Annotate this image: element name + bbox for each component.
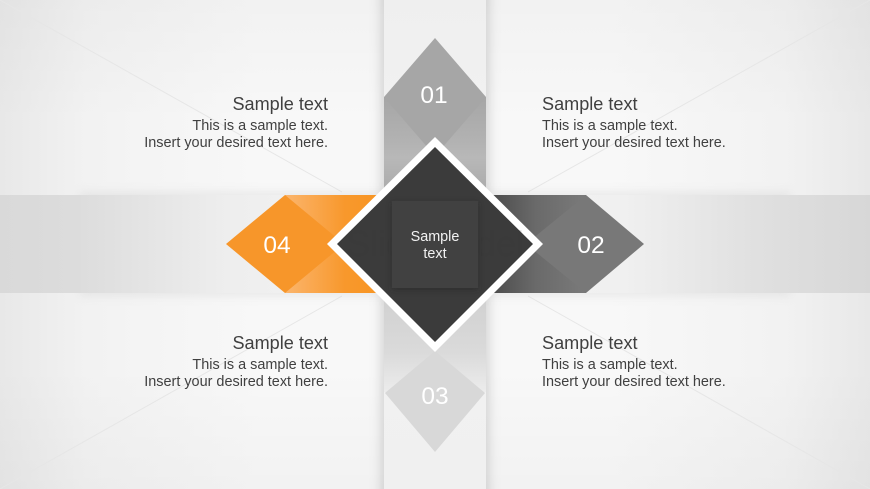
center diamond: [327, 137, 543, 352]
watermark: SlideModel: [346, 223, 524, 264]
inner square shadow: [392, 203, 478, 290]
text block: bottom left: Insert your desired text here.: [144, 374, 328, 390]
arrow: 04 orange: [226, 195, 385, 293]
arrow: 02 gray: [486, 195, 644, 293]
text block: bottom right: This is a sample text.: [542, 357, 678, 373]
panel: horizontal band: [0, 192, 870, 296]
text block: top right: Sample text: [542, 94, 638, 114]
text block: bottom right: Sample text: [542, 333, 638, 353]
center label: Sample: [411, 229, 459, 245]
arrow: 03 light gray: [384, 293, 486, 452]
text block: bottom left: This is a sample text.: [192, 357, 328, 373]
inner square: [392, 201, 478, 288]
label: 02: 02: [577, 232, 605, 259]
text block: top right: Insert your desired text here.: [542, 135, 726, 151]
panel: vertical band: [382, 0, 488, 489]
text block: bottom right: [542, 333, 726, 390]
text block: top left: Insert your desired text here.: [144, 135, 328, 151]
center label: text: [423, 246, 447, 262]
text block: bottom right: Insert your desired text here.: [542, 374, 726, 390]
text block: top left: This is a sample text.: [192, 118, 328, 134]
label: 03: 03: [421, 383, 449, 410]
text block: top right: This is a sample text.: [542, 118, 678, 134]
label: 04: 04: [263, 232, 291, 259]
text block: bottom left: Sample text: [232, 333, 328, 353]
text block: top left: Sample text: [232, 94, 328, 114]
text block: top left: [144, 94, 328, 151]
text block: top right: [542, 94, 726, 151]
text block: bottom left: [144, 333, 328, 390]
label: 01: 01: [420, 82, 448, 109]
arrow: 01 gray: [384, 38, 486, 195]
